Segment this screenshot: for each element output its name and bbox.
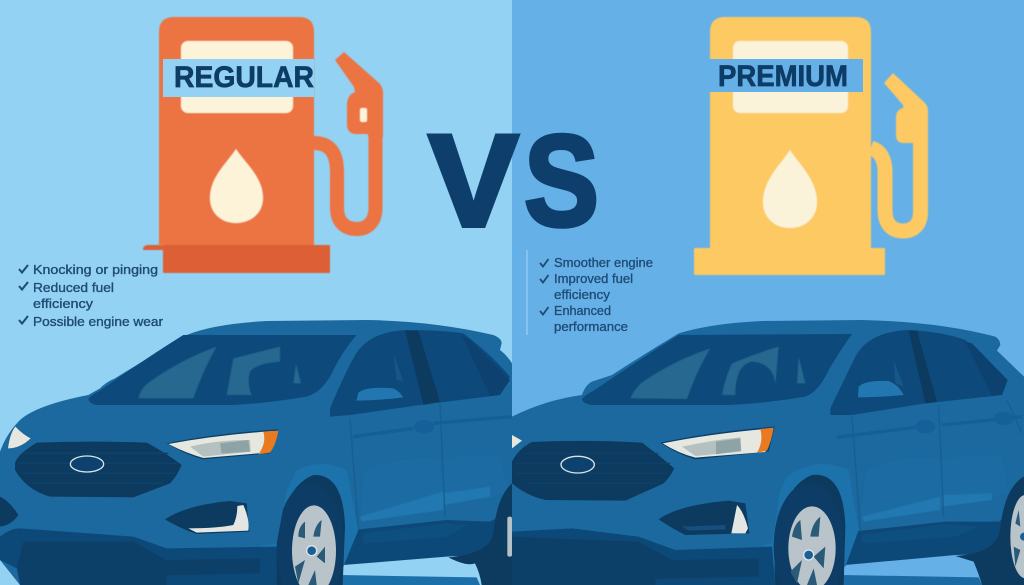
label: premium: PREMIUM (718, 60, 848, 93)
text block: premium effects: performance (554, 320, 628, 334)
text block: premium effects: efficiency (554, 288, 611, 302)
text block: premium effects: Enhanced (554, 304, 611, 318)
heading: VS: S (524, 108, 599, 254)
text block: regular effects: Reduced fuel (33, 280, 114, 295)
text block: regular effects: efficiency (33, 296, 94, 311)
text block: regular effects: Knocking or pinging (33, 262, 158, 277)
panel: regular background (0, 0, 512, 585)
icon: premium fuel pump (694, 17, 928, 275)
text block: regular effects (19, 262, 164, 329)
illustration: premium car (512, 320, 1024, 585)
icon: regular fuel pump (143, 17, 383, 273)
text block: regular effects: Possible engine wear (33, 314, 164, 329)
text block: premium effects (526, 250, 653, 335)
text block: premium effects: Improved fuel (554, 272, 633, 286)
label: regular: REGULAR (174, 61, 314, 94)
panel: premium background (512, 0, 1024, 585)
illustration: regular car (0, 320, 512, 585)
text block: premium effects: Smoother engine (554, 256, 653, 270)
heading: VS: V (429, 108, 518, 254)
heading: VS (429, 108, 599, 254)
